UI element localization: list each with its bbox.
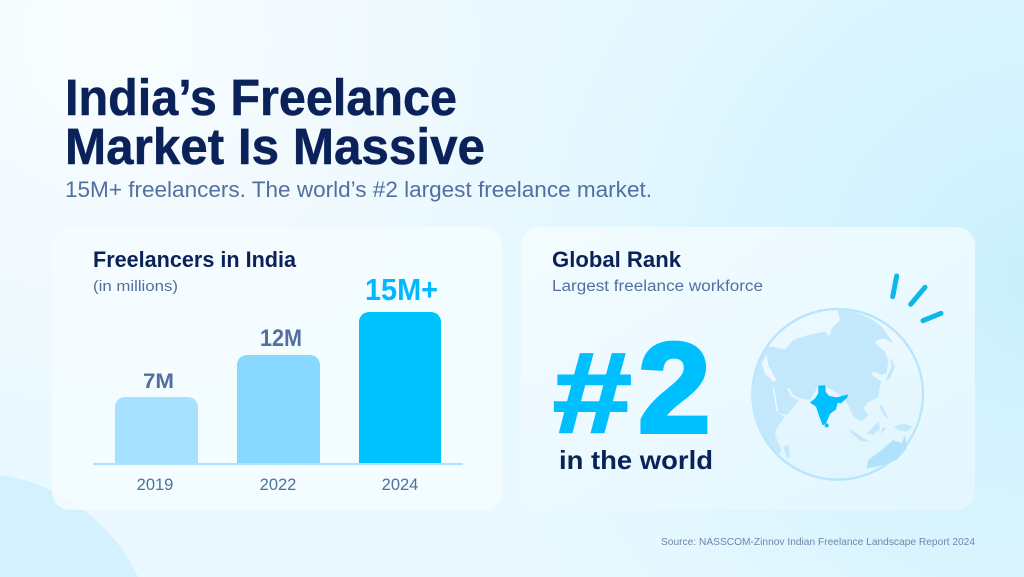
title: Market Is Massive: [65, 118, 485, 175]
year labels: 2022: [260, 476, 296, 494]
bar: 2022: [237, 355, 320, 464]
big rank number: #: [553, 330, 632, 457]
panel heading: Freelancers in India: [93, 247, 297, 272]
value labels: [143, 272, 438, 393]
value labels: 7M: [143, 369, 174, 393]
panel: global rank: [521, 227, 975, 510]
India: [810, 385, 848, 425]
big rank number: 2: [638, 317, 711, 460]
title: India’s Freelance: [65, 69, 457, 126]
year labels: 2024: [382, 476, 418, 494]
bar: 2024: [359, 312, 441, 464]
axis line: [93, 463, 463, 465]
title: [65, 69, 485, 175]
card background: [52, 227, 502, 510]
value labels: 12M: [260, 325, 302, 352]
source note: Source: NASSCOM-Zinnov Indian Freelance Landscape Report 2024: [661, 536, 975, 548]
Sri Lanka: [825, 423, 829, 427]
panel subheading: Largest freelance workforce: [552, 278, 763, 295]
panel: freelancers in India: [52, 227, 502, 510]
globe disc: [752, 309, 923, 480]
bar: 2019: [115, 397, 198, 464]
land: Eurasia and Africa: [752, 309, 893, 455]
land: Madagascar: [783, 445, 790, 458]
value labels: 15M+: [365, 272, 438, 307]
big rank number: [553, 317, 711, 460]
land: Japan: [886, 357, 895, 382]
decorative corner blob: [0, 475, 138, 577]
panel heading: Global Rank: [552, 247, 682, 272]
panel subheading: (in millions): [93, 278, 178, 295]
subtitle: 15M+ freelancers. The world’s #2 largest freelance market.: [65, 177, 652, 202]
bar chart: [93, 272, 463, 494]
icon: globe with India highlighted: [752, 309, 923, 480]
rank caption: in the world: [559, 445, 713, 475]
land: Australia: [867, 435, 907, 468]
icon: emphasis rays: [893, 276, 941, 321]
seas: Mediterranean, Red Sea, Persian Gulf: [762, 355, 800, 412]
year labels: 2019: [137, 476, 173, 494]
year labels: [137, 476, 418, 494]
card background: [521, 227, 975, 510]
land: southeast Asian islands: [848, 403, 913, 442]
